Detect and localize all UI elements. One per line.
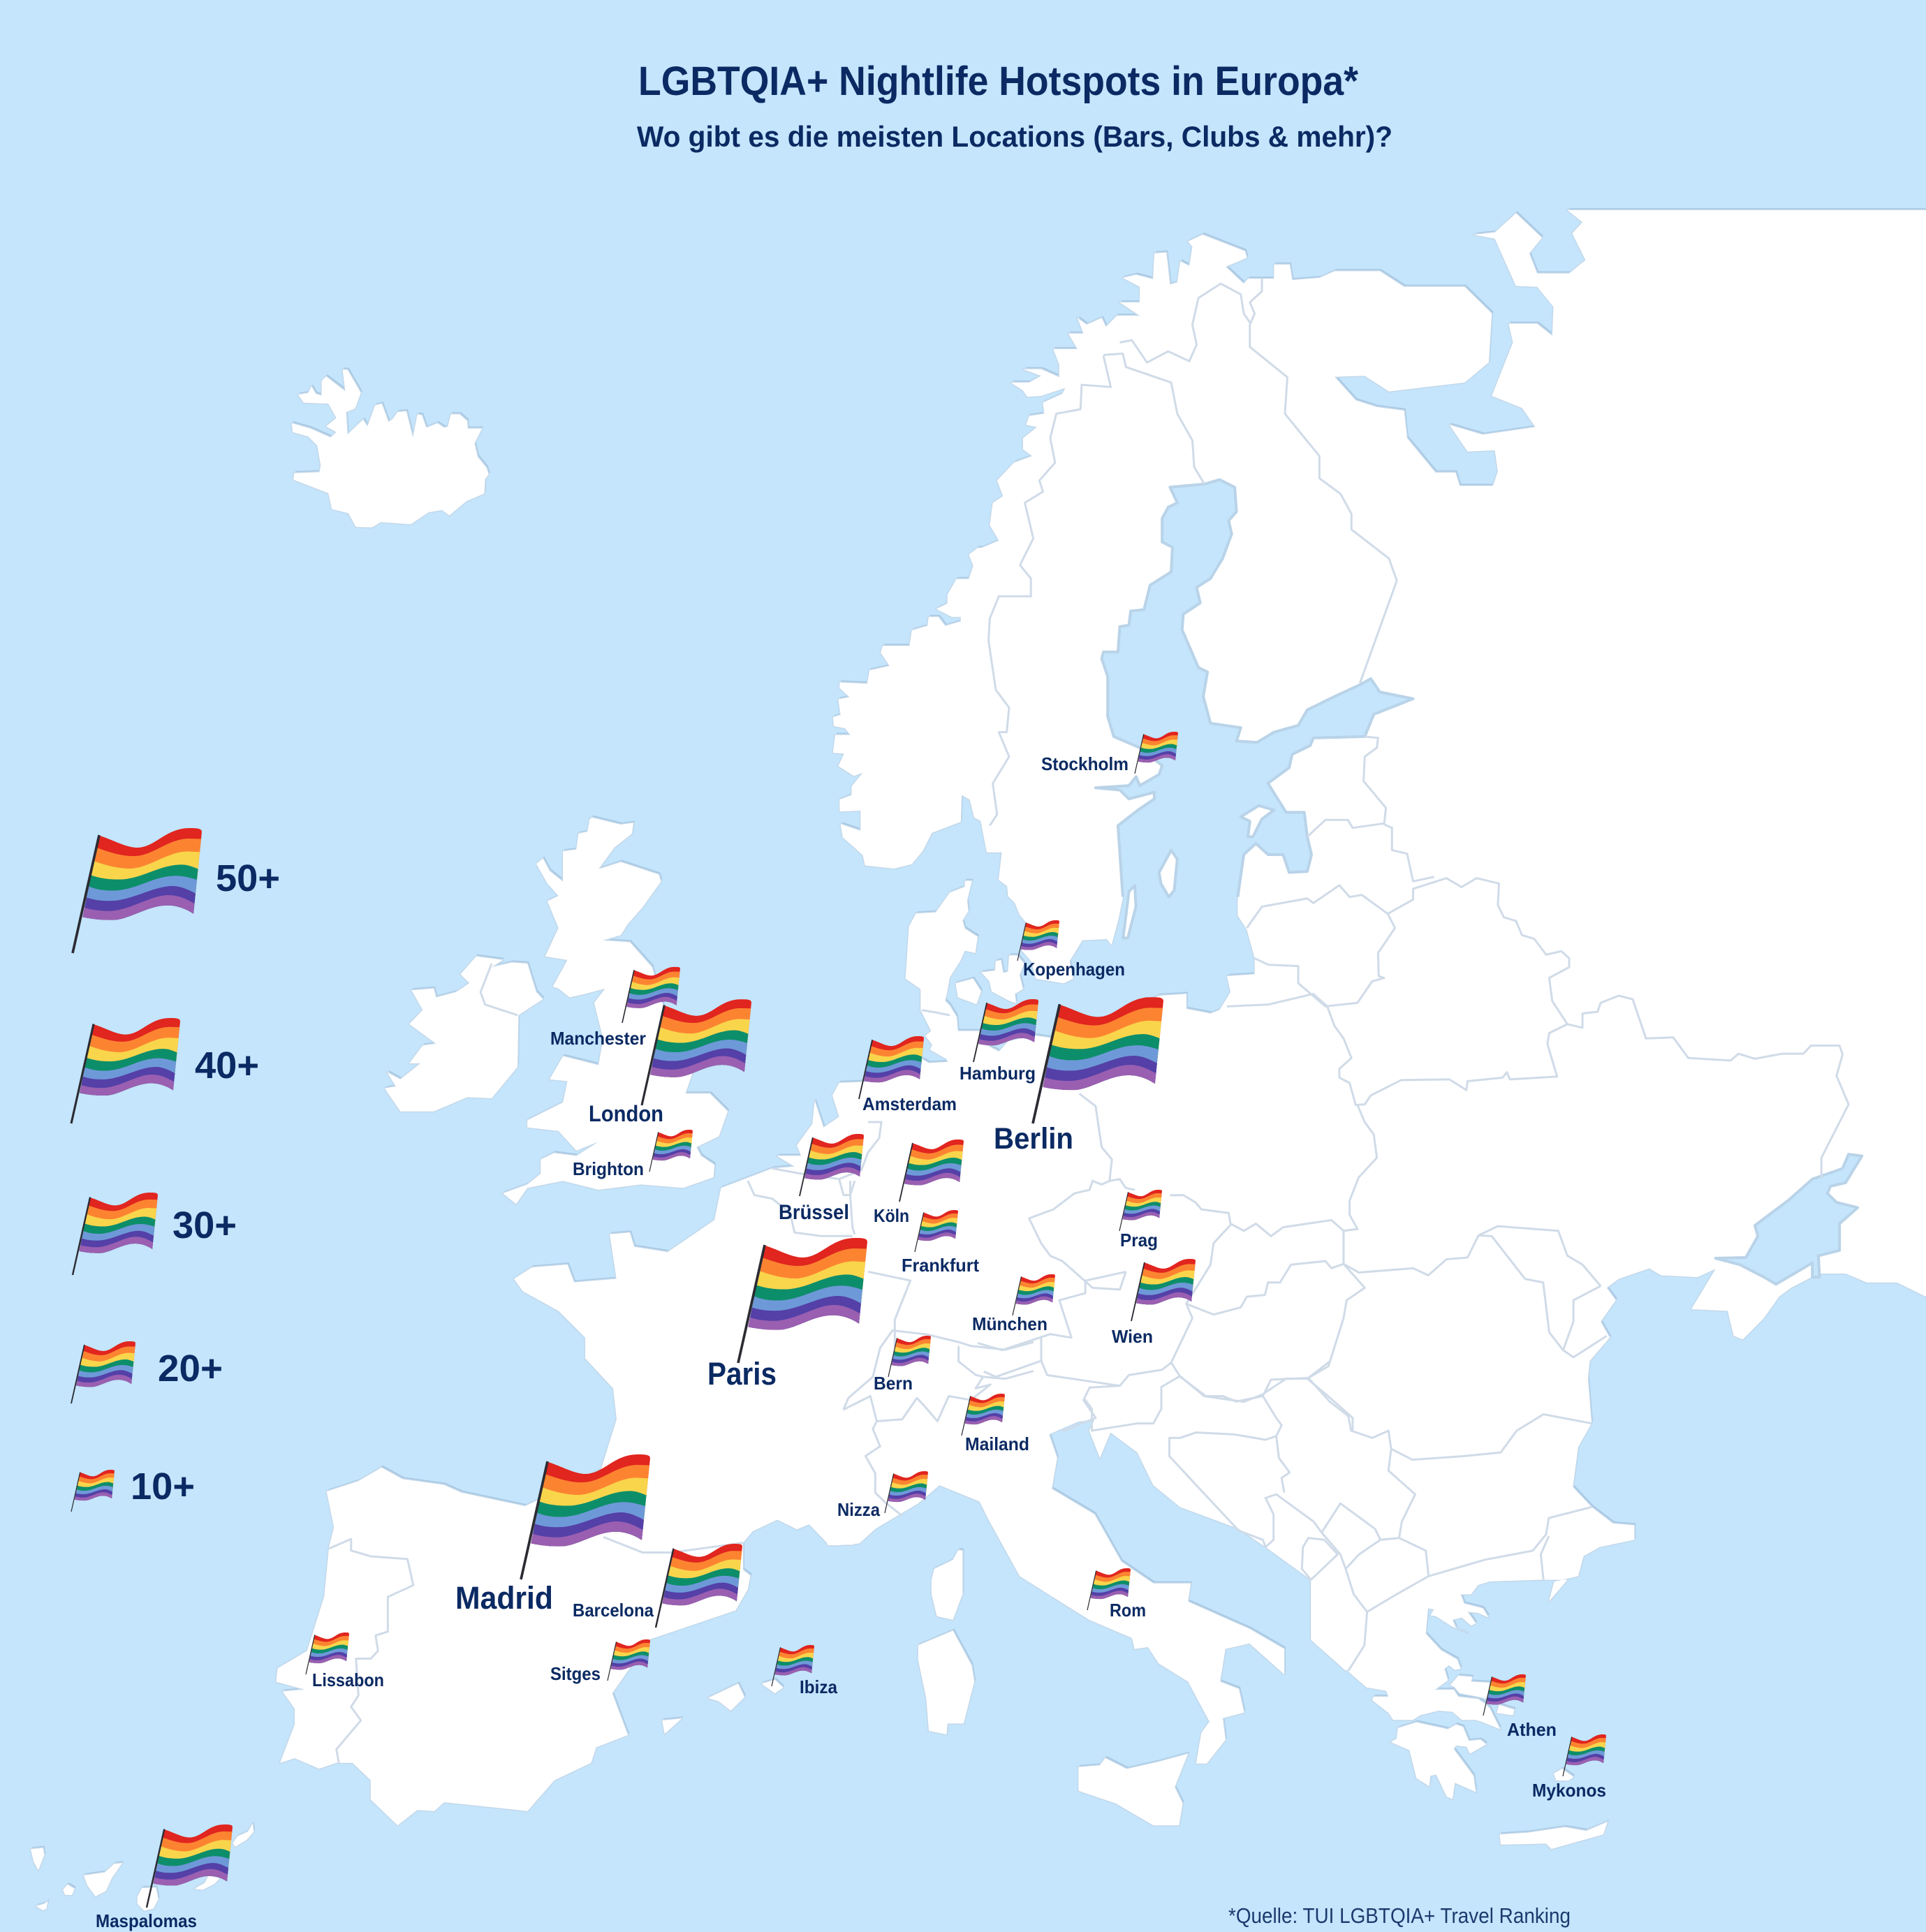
marker: Mykonos xyxy=(1532,1734,1607,1801)
marker: Madrid: Madrid xyxy=(455,1580,553,1616)
subtitle: Wo gibt es die meisten Locations (Bars, Clubs & mehr)? xyxy=(637,120,1392,153)
marker: Amsterdam: Amsterdam xyxy=(862,1093,957,1114)
marker: Brighton xyxy=(573,1129,693,1179)
title: LGBTQIA+ Nightlife Hotspots in Europa* xyxy=(638,59,1358,104)
marker: Nizza xyxy=(837,1470,929,1520)
marker: Bern: Bern xyxy=(874,1373,913,1394)
legend item: 10+: 10+ xyxy=(131,1466,195,1507)
marker: Paris xyxy=(707,1236,870,1392)
marker: Nizza: Nizza xyxy=(837,1499,880,1520)
marker: Manchester: Manchester xyxy=(550,1028,646,1049)
marker: Maspalomas xyxy=(96,1823,235,1931)
marker: Bern xyxy=(874,1335,932,1394)
marker: London: London xyxy=(589,1101,663,1126)
legend item: 50+: 50+ xyxy=(216,857,280,899)
legend item: 30+: 30+ xyxy=(172,1204,237,1246)
legend item: 20+ xyxy=(71,1341,223,1403)
marker: Amsterdam xyxy=(859,1035,957,1114)
legend item: 20+: 20+ xyxy=(158,1348,223,1389)
marker: Rom: Rom xyxy=(1110,1600,1146,1621)
legend xyxy=(71,826,280,1512)
marker: Brighton: Brighton xyxy=(573,1158,644,1179)
legend item: 40+ xyxy=(71,1017,259,1123)
marker: Barcelona: Barcelona xyxy=(573,1600,654,1621)
marker: Köln xyxy=(874,1139,965,1226)
marker: Köln: Köln xyxy=(874,1205,909,1226)
marker: Hamburg: Hamburg xyxy=(960,1063,1036,1084)
marker: Athen xyxy=(1483,1674,1557,1740)
marker: Lissabon: Lissabon xyxy=(312,1669,384,1690)
marker: London xyxy=(589,998,754,1126)
marker: Berlin: Berlin xyxy=(994,1122,1073,1156)
map: Baltic sea and gulfs xyxy=(1096,480,1862,1284)
marker: Frankfurt xyxy=(902,1209,979,1276)
marker: Sitges: Sitges xyxy=(550,1663,601,1684)
marker: Madrid xyxy=(455,1452,653,1616)
legend item: 10+ xyxy=(71,1466,195,1512)
legend item: 30+ xyxy=(73,1191,237,1275)
marker: Berlin xyxy=(994,995,1166,1156)
marker: Kopenhagen: Kopenhagen xyxy=(1023,959,1125,980)
marker: Rom xyxy=(1087,1568,1146,1621)
marker: Stockholm: Stockholm xyxy=(1041,753,1129,774)
marker: Manchester xyxy=(550,966,682,1049)
marker: Prag: Prag xyxy=(1120,1230,1158,1251)
marker: München: München xyxy=(972,1313,1047,1334)
marker: Hamburg xyxy=(960,998,1040,1084)
marker: Frankfurt: Frankfurt xyxy=(902,1255,979,1276)
marker: Mailand xyxy=(962,1393,1029,1454)
source note: *Quelle: TUI LGBTQIA+ Travel Ranking xyxy=(1228,1903,1571,1928)
marker: Wien: Wien xyxy=(1112,1326,1153,1347)
marker: Paris: Paris xyxy=(707,1356,777,1392)
marker: Lissabon xyxy=(306,1632,384,1690)
marker: Prag xyxy=(1119,1189,1163,1251)
legend item: 50+ xyxy=(73,826,280,953)
marker: Stockholm xyxy=(1041,731,1179,774)
marker: Mailand: Mailand xyxy=(965,1433,1029,1454)
marker: Ibiza xyxy=(772,1644,837,1697)
marker: München xyxy=(972,1274,1056,1334)
marker: Brüssel xyxy=(779,1133,865,1224)
legend item: 40+: 40+ xyxy=(195,1045,259,1086)
marker: Sitges xyxy=(550,1639,651,1684)
marker: Brüssel: Brüssel xyxy=(779,1201,849,1224)
marker: Mykonos: Mykonos xyxy=(1532,1780,1606,1801)
marker: Barcelona xyxy=(573,1542,744,1628)
marker: Kopenhagen xyxy=(1017,920,1125,980)
marker: Maspalomas: Maspalomas xyxy=(96,1910,197,1931)
marker: Ibiza: Ibiza xyxy=(800,1676,837,1697)
marker: Athen: Athen xyxy=(1507,1719,1557,1740)
marker: Wien xyxy=(1112,1258,1197,1347)
map: country borders xyxy=(329,279,1848,1763)
